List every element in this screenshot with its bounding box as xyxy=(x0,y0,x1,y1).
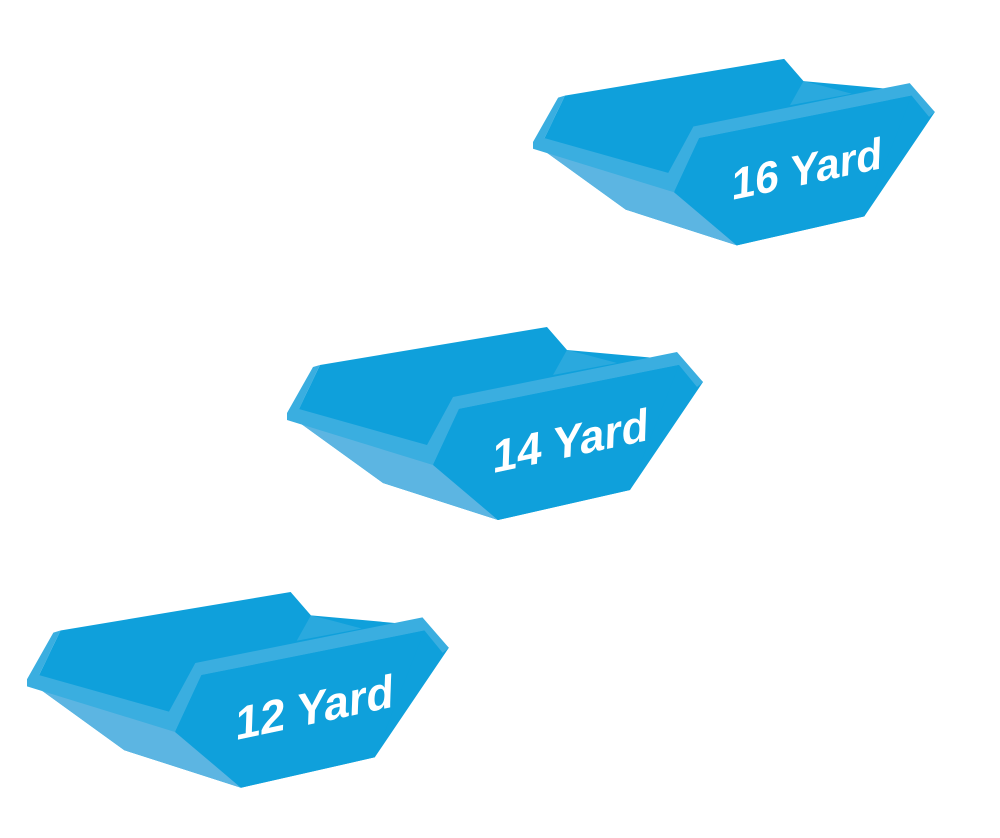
skip: 16 Yard xyxy=(533,59,935,245)
skip: 12 Yard xyxy=(27,592,449,788)
skip: 14 Yard xyxy=(287,327,703,520)
label: 12 Yard: 12 Yard xyxy=(235,664,395,750)
label: 14 Yard: 14 Yard xyxy=(492,399,649,483)
label: 16 Yard: 16 Yard xyxy=(731,129,883,210)
